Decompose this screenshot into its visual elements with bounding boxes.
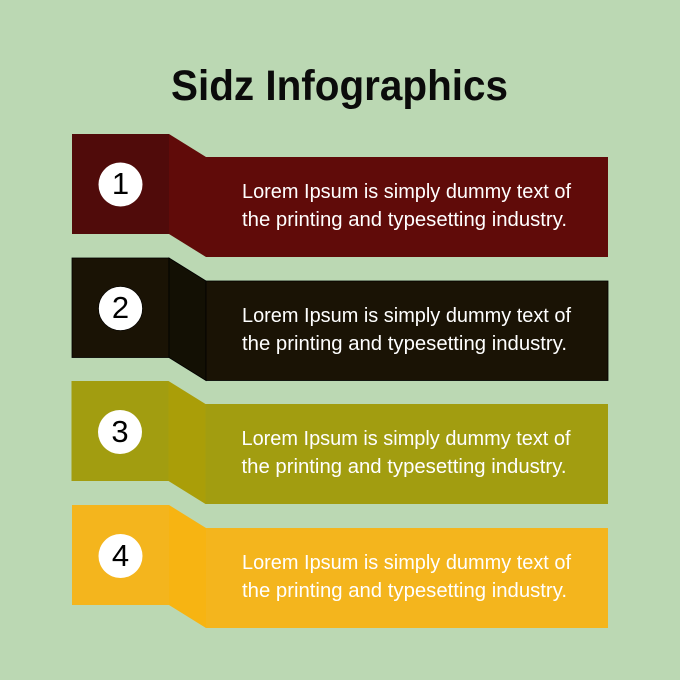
text bar 3	[206, 404, 608, 504]
number badge 3	[98, 410, 142, 454]
number badge 4: 4	[112, 538, 129, 573]
text block 2: Lorem Ipsum is simply dummy text of	[242, 305, 571, 327]
text bar 1	[206, 157, 608, 257]
panel: step 3	[72, 381, 608, 504]
number badge 2: 2	[112, 290, 129, 325]
text block 1: Lorem Ipsum is simply dummy text of	[242, 181, 571, 203]
text bar 4	[206, 528, 608, 628]
number badge 3: 3	[111, 414, 129, 449]
number badge 1: 1	[112, 166, 129, 201]
fold 3	[168, 381, 206, 504]
number badge 1	[98, 162, 142, 206]
text block 4: Lorem Ipsum is simply dummy text of	[242, 552, 571, 574]
number tab 2	[72, 258, 169, 358]
panel: step 4	[72, 505, 608, 628]
number badge 4	[98, 534, 142, 578]
fold 2	[169, 258, 206, 380]
panel: step 1	[72, 134, 608, 257]
text bar 2	[206, 281, 608, 380]
text block 4: the printing and typesetting industry.	[242, 580, 567, 602]
fold 1	[169, 134, 206, 257]
number tab 3	[72, 381, 168, 481]
number badge 2	[98, 286, 142, 330]
number tab 4	[72, 505, 169, 605]
number tab 1	[72, 134, 169, 234]
text block 3: Lorem Ipsum is simply dummy text of	[242, 428, 571, 450]
panel: step 2	[72, 258, 608, 380]
text block 1: the printing and typesetting industry.	[242, 209, 567, 231]
fold 4	[169, 505, 206, 628]
text block 3: the printing and typesetting industry.	[242, 456, 566, 478]
text block 2: the printing and typesetting industry.	[242, 333, 567, 355]
title: Sidz Infographics	[171, 62, 508, 110]
